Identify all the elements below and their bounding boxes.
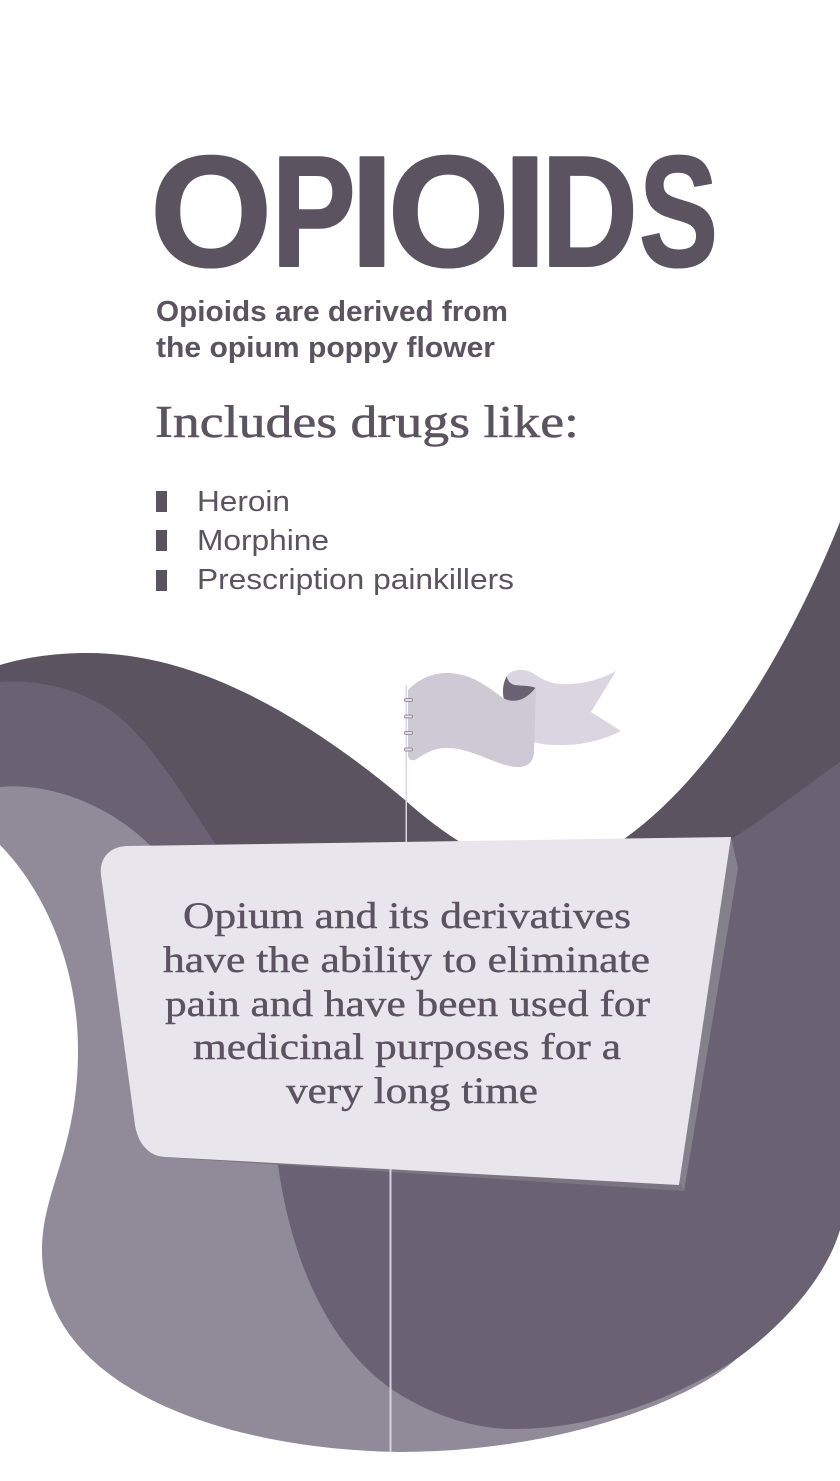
flag back ribbon xyxy=(507,670,621,745)
heading: includes drugs: Includes drugs like: xyxy=(155,397,579,447)
title xyxy=(150,123,718,300)
title: P xyxy=(272,124,356,300)
subtitle xyxy=(156,296,508,364)
flag front xyxy=(408,673,536,767)
flag fold xyxy=(503,676,536,705)
item: prescription painkillers: Prescription painkillers xyxy=(197,564,514,596)
wave: middle layer xyxy=(0,682,840,1442)
subtitle: the opium poppy flower xyxy=(156,332,495,364)
subtitle: Opioids are derived from xyxy=(156,296,508,328)
title: I xyxy=(503,124,547,300)
item: morphine: Morphine xyxy=(197,525,329,557)
flag pole: upper xyxy=(406,685,407,845)
icon: flag xyxy=(404,670,621,767)
flag pole: lower xyxy=(390,1160,392,1452)
callout sign xyxy=(101,837,738,1452)
sign text xyxy=(163,896,650,1112)
flag rings xyxy=(404,698,412,751)
sign text: have the ability to eliminate xyxy=(163,940,650,981)
title: I xyxy=(350,124,394,300)
title: O xyxy=(150,124,272,300)
sign text: very long time xyxy=(286,1071,538,1112)
title: D xyxy=(541,124,638,300)
sign text: Opium and its derivatives xyxy=(183,896,631,937)
sign shadow: bottom xyxy=(160,1150,684,1191)
bullet: prescription painkillers xyxy=(156,570,167,591)
sign panel xyxy=(101,837,731,1185)
bullet: heroin xyxy=(156,491,167,512)
sign text: medicinal purposes for a xyxy=(193,1027,621,1068)
sign text: pain and have been used for xyxy=(165,984,650,1025)
item: heroin: Heroin xyxy=(197,486,290,518)
sign shadow: right xyxy=(679,837,738,1191)
bullet: morphine xyxy=(156,530,167,551)
wave: darkest layer xyxy=(0,522,840,1000)
title: O xyxy=(388,124,510,300)
wave: light layer xyxy=(0,786,735,1452)
title: S xyxy=(639,123,718,300)
drug list xyxy=(156,486,514,596)
